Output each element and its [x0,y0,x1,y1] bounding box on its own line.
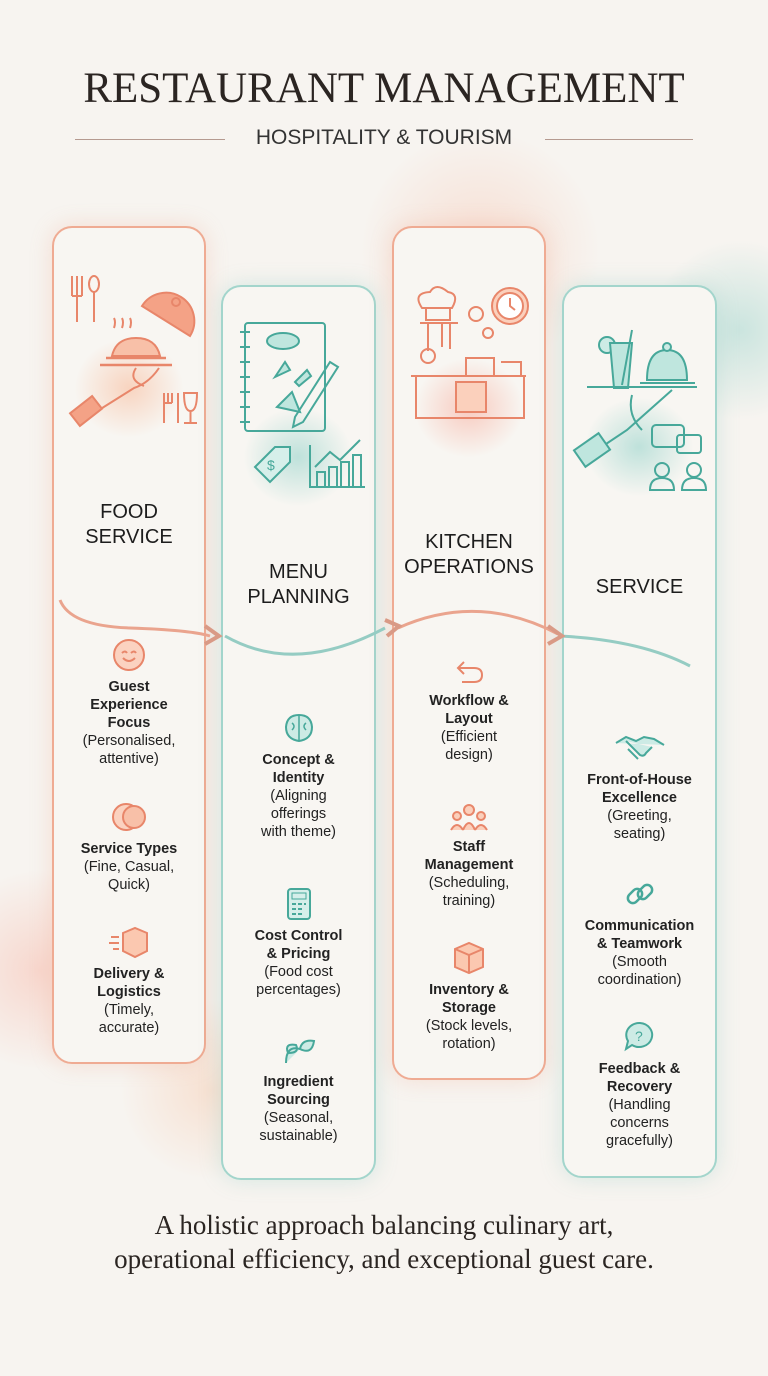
icon glow [584,397,694,497]
item: cost control: percentages) [256,982,341,998]
item: concept: Identity [273,770,324,786]
item: delivery [94,926,164,1036]
item: feedback: Recovery [607,1079,672,1095]
item: staff management: Management [425,857,513,873]
footer text [114,1210,654,1274]
item: ingredient sourcing: Sourcing [267,1092,330,1108]
heading [247,561,350,608]
item: cost control: & Pricing [267,946,330,962]
item: inventory [426,942,512,1052]
heading: MENU [269,561,328,583]
heading: FOOD [100,501,158,523]
icon: tray and guests [572,330,707,491]
item: service types [81,803,177,893]
item: delivery: accurate) [99,1020,159,1036]
footer text: operational efficiency, and exceptional guest care. [114,1244,654,1274]
item: concept [261,714,336,840]
item: staff management: training) [443,893,495,909]
item: staff management: Staff [453,839,485,855]
item: inventory: (Stock levels, [426,1018,512,1034]
item: workflow [429,661,509,763]
heading: KITCHEN [425,531,513,553]
item: front-of-house: (Greeting, [607,808,672,824]
item: front-of-house: Front-of-House [587,772,692,788]
item: staff management [425,804,514,909]
icon: kitchen [411,286,529,419]
item: delivery: Logistics [97,984,161,1000]
heading: SERVICE [596,576,683,598]
item: feedback: ? [634,1028,642,1044]
item: concept: Concept & [262,752,335,768]
item: delivery: (Timely, [104,1002,154,1018]
item: cost control: (Food cost [264,964,333,980]
item: concept: with theme) [261,824,336,840]
item: workflow: Workflow & [429,693,509,709]
subtitle: HOSPITALITY & TOURISM [256,126,512,149]
item: concept: offerings [271,806,326,822]
item: service types: Service Types [81,841,177,857]
item: guest experience: Experience [90,697,168,713]
icon: menu notebook [240,322,365,488]
item: guest experience: Guest [108,679,150,695]
item: ingredient sourcing [259,1040,338,1144]
heading [404,531,534,578]
heading: OPERATIONS [404,556,534,578]
item: inventory: rotation) [442,1036,496,1052]
item: communication: Communication [585,918,694,934]
item: inventory: Storage [442,1000,496,1016]
item: staff management: (Scheduling, [429,875,509,891]
item: front-of-house: seating) [614,826,665,842]
item: ingredient sourcing: sustainable) [259,1128,338,1144]
item: inventory: Inventory & [429,982,509,998]
item: service types: Quick) [108,877,150,893]
item: guest experience [83,639,175,767]
item: communication: coordination) [598,972,681,988]
item: communication [585,884,694,988]
footer text: A holistic approach balancing culinary art, [155,1210,613,1240]
item: workflow: Layout [445,711,493,727]
item: concept: (Aligning [270,788,327,804]
item: guest experience: attentive) [99,751,159,767]
arrow: flow connector [58,600,691,668]
title: RESTAURANT MANAGEMENT [83,65,685,112]
item: workflow: (Efficient [441,729,497,745]
item: feedback: gracefully) [606,1133,673,1149]
panel: menu planning [221,285,376,1180]
item: service types: (Fine, Casual, [84,859,174,875]
panel: service [562,285,717,1178]
item: feedback: (Handling [608,1097,671,1113]
item: cost control [255,888,342,998]
item: front-of-house [587,736,692,842]
icon glow [414,358,524,458]
item: guest experience: (Personalised, [83,733,175,749]
item: front-of-house: Excellence [602,790,677,806]
item: communication: & Teamwork [597,936,682,952]
icon: cloche [68,275,198,428]
icon glow [74,338,184,438]
item: delivery: Delivery & [94,966,164,982]
item: workflow: design) [445,747,493,763]
icon: menu notebook: $ [267,457,275,473]
panel: food service [52,226,206,1064]
item: communication: (Smooth [612,954,667,970]
heading: PLANNING [247,586,350,608]
item: ingredient sourcing: (Seasonal, [264,1110,333,1126]
icon glow [243,407,353,507]
item: feedback: concerns [610,1115,669,1131]
item: feedback: Feedback & [599,1061,680,1077]
panel: kitchen operations [392,226,546,1080]
item: ingredient sourcing: Ingredient [263,1074,334,1090]
heading [85,501,173,548]
item: feedback [599,1022,680,1149]
heading: SERVICE [85,526,173,548]
item: guest experience: Focus [108,715,150,731]
item: cost control: Cost Control [255,928,342,944]
